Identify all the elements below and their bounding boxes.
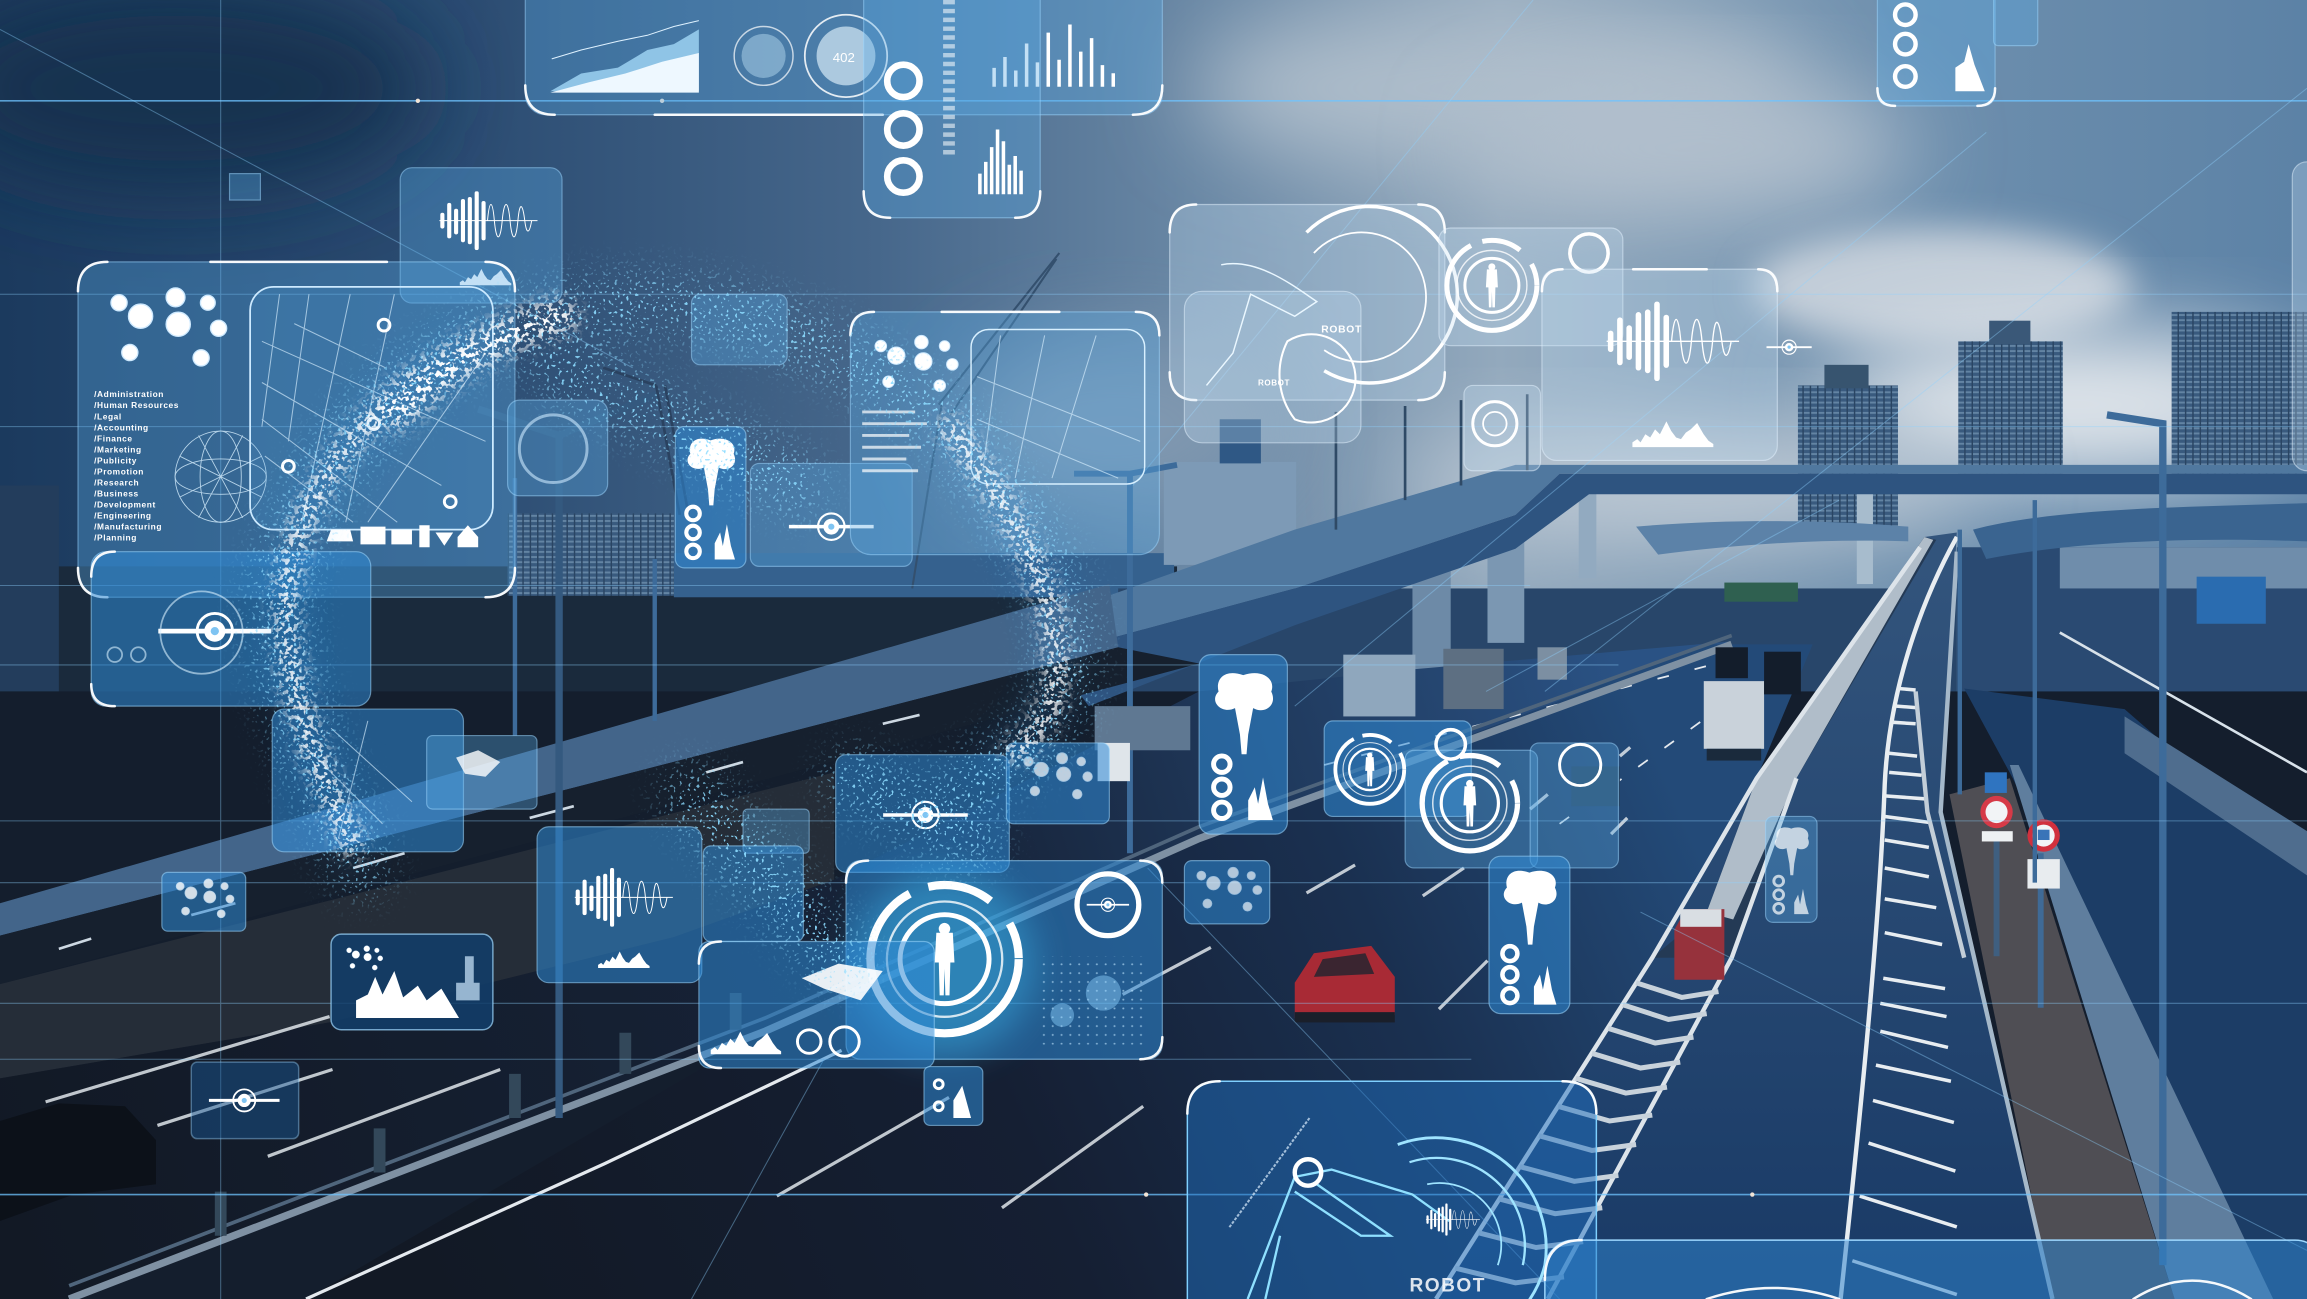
elevated flyover [1051, 465, 2307, 706]
lane markings [46, 655, 1773, 1299]
panel: waveform upper left [400, 168, 562, 303]
robot label: ROBOT [1410, 1276, 1486, 1297]
department list: /Accounting [94, 422, 149, 432]
panel: top right [1877, 0, 2038, 106]
median guard rail [69, 636, 1732, 1299]
small gauges: 402 [833, 50, 855, 65]
panel: bottom right [1545, 1240, 2307, 1299]
panel: skyline chart [331, 934, 493, 1030]
panel: mid left cluster [272, 709, 537, 852]
lower left carriageway [0, 641, 1732, 1299]
panel: departments and map [78, 262, 515, 597]
department list [94, 389, 179, 543]
black car bottom left [0, 1103, 156, 1221]
distant trucks [1095, 649, 1504, 781]
panel: tree tile far right [1766, 816, 1817, 922]
robot label: ROBOT [1321, 324, 1362, 335]
vehicles [0, 647, 1801, 1221]
panel: robot arm bottom [1187, 1081, 1596, 1299]
department list: /Administration [94, 389, 164, 399]
department list: /Human Resources [94, 400, 179, 410]
radial robot dial [1206, 206, 1457, 423]
panel: person gauge light [1439, 228, 1623, 471]
department list: /Manufacturing [94, 522, 162, 532]
panel: large person gauge [846, 861, 1162, 1059]
right ramp road [1436, 533, 2052, 1299]
department list: /Publicity [94, 455, 137, 465]
robot label lower: ROBOT [1258, 378, 1290, 387]
panel: small tag upper left [230, 174, 260, 200]
panel: lower chart tile [699, 942, 934, 1068]
panel: vertical dashboard [864, 0, 1040, 218]
department list: /Marketing [94, 444, 142, 454]
world node map [111, 288, 227, 366]
ground base [0, 691, 2307, 1299]
ramp barrier, chevrons and dashes [1436, 537, 1964, 1299]
department list: /Research [94, 477, 139, 487]
device icon row [327, 525, 478, 547]
wireframe globe [175, 431, 266, 522]
distant city and towers [0, 253, 2307, 878]
particle ring [279, 304, 1067, 956]
inner city map [250, 287, 493, 530]
red truck on ramp [1674, 909, 1724, 980]
department list: /Planning [94, 533, 137, 543]
sky background [0, 0, 2307, 824]
upper left carriageway, barrier and retaining wall [0, 584, 1199, 1078]
department list: /Finance [94, 433, 133, 443]
right service road and gravel verge [1941, 552, 2307, 1299]
red car [1295, 946, 1395, 1022]
street lamps [478, 394, 2163, 1265]
department list: /Legal [94, 411, 122, 421]
panel: tree tile centre [1199, 655, 1287, 834]
panel: gauge lower left [91, 552, 371, 706]
panel: top dashboard [525, 0, 1162, 115]
department list: /Engineering [94, 511, 152, 521]
white box truck [1704, 681, 1764, 761]
panel: node tile [1184, 861, 1270, 924]
panel: person gauges centre right [1324, 721, 1618, 868]
panel: robot arm light [1170, 204, 1457, 443]
panel: small target tile left [191, 1062, 299, 1139]
small gauges [734, 15, 887, 97]
robot arm [1248, 1170, 1449, 1299]
panel: waveform light [1542, 269, 1812, 460]
panel: small tiles mid [743, 743, 1109, 872]
main carriageway [306, 644, 1813, 1299]
panel: tree tile right [1489, 856, 1570, 1014]
department list: /Development [94, 500, 156, 510]
spike chart [994, 25, 1113, 87]
particles: sparse blue [279, 304, 1067, 956]
panel: small node tile left [162, 872, 246, 931]
dark trucks [1538, 647, 1801, 806]
column chart [980, 129, 1021, 194]
road signs [1980, 772, 2060, 1008]
radial robot dial [1398, 1138, 1546, 1299]
area chart [550, 21, 699, 93]
panels: floating ring tiles [508, 294, 912, 568]
department list: /Promotion [94, 466, 144, 476]
ring icons [887, 65, 920, 193]
panel: upper centre map [850, 312, 1159, 555]
panel: waveform lower [537, 827, 803, 983]
panel: small spike tile [924, 1067, 983, 1125]
department list: /Business [94, 489, 139, 499]
panel: right edge sliver [2292, 162, 2307, 471]
particles: bright white [286, 316, 1057, 846]
